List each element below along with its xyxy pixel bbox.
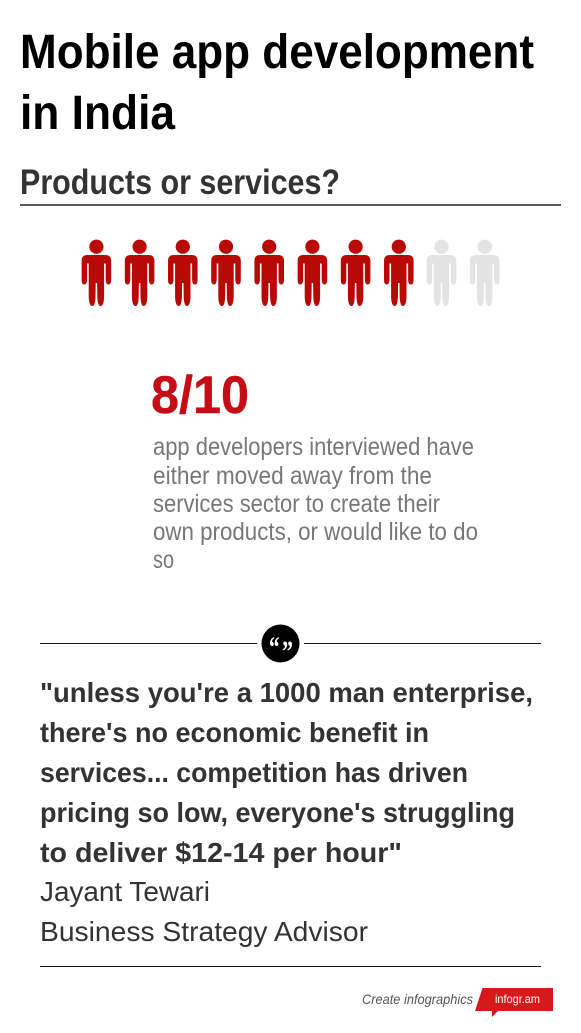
title: in India bbox=[20, 87, 175, 140]
title: Mobile app development bbox=[20, 26, 534, 79]
statistic description: services sector to create their bbox=[153, 490, 440, 518]
statistic: 8/10: 8/10 bbox=[151, 366, 249, 425]
footer logo: infogr.am bbox=[475, 988, 553, 1017]
quote: there's no economic benefit in bbox=[40, 717, 429, 748]
quote: services... competition has driven bbox=[40, 757, 468, 788]
icon: quotation marks: ” bbox=[282, 635, 293, 668]
statistic description: app developers interviewed have bbox=[153, 433, 474, 461]
statistic description: own products, or would like to do bbox=[153, 518, 478, 546]
statistic description bbox=[153, 433, 478, 574]
heading: products or services: Products or services? bbox=[20, 163, 340, 202]
quote: to deliver $12-14 per hour" bbox=[40, 837, 402, 868]
statistic description: either moved away from the bbox=[153, 462, 432, 490]
pictogram: 8 of 10 people bbox=[82, 240, 500, 306]
title bbox=[20, 26, 534, 140]
statistic description: so bbox=[153, 546, 174, 574]
icon: quotation marks bbox=[262, 624, 300, 668]
icon: quotation marks: “ bbox=[269, 631, 280, 664]
quote bbox=[40, 677, 533, 868]
footer: create infographics: Create infographics bbox=[362, 991, 473, 1007]
quote attribution bbox=[40, 876, 368, 947]
quote attribution: Business Strategy Advisor bbox=[40, 916, 368, 947]
quote: pricing so low, everyone's struggling bbox=[40, 797, 515, 828]
quote: "unless you're a 1000 man enterprise, bbox=[40, 677, 533, 708]
quote attribution: Jayant Tewari bbox=[40, 876, 210, 907]
footer logo: infogr.am: infogr.am bbox=[495, 992, 540, 1006]
